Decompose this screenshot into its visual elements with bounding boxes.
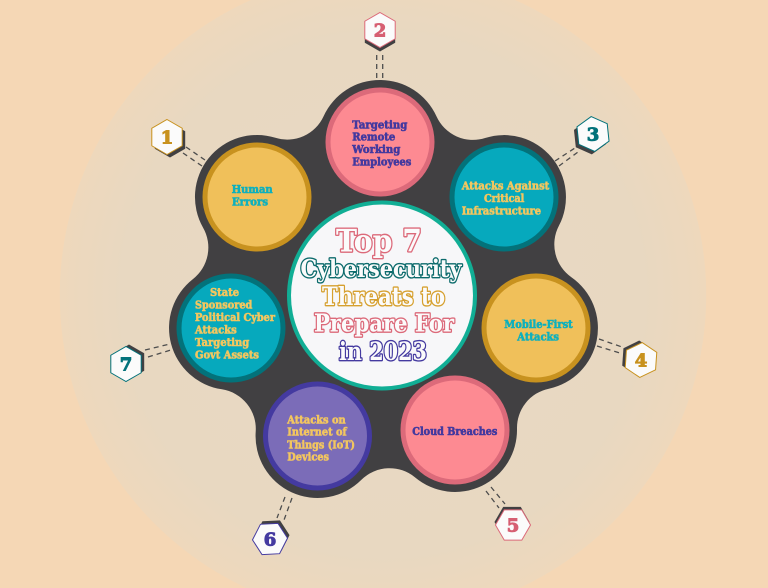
panel 6: attacks on internet of things: Internet of — [287, 426, 348, 439]
panel 6: attacks on internet of things — [263, 382, 372, 490]
panel 3: attacks against critical infrastructure: Attacks Against — [461, 179, 550, 192]
badge 6 with connector — [249, 497, 293, 561]
panel 3: attacks against critical infrastructure: Critical — [484, 192, 524, 205]
panel 1: human errors: Human — [232, 183, 273, 196]
panel 2: targeting remote working employees: Remote — [352, 130, 395, 144]
badge 2 with connector: 2 — [374, 20, 386, 42]
badge 1 with connector: 1 — [161, 128, 173, 148]
badge 4 with connector: 4 — [635, 350, 647, 372]
panel 7: state sponsored political cyber attacks: Govt Assets — [195, 348, 259, 361]
center title panel: Cybersecurity — [300, 254, 462, 283]
panel 6: attacks on internet of things: Things (IoT) — [287, 438, 355, 451]
badge 4 with connector — [597, 339, 657, 379]
center title panel: Prepare For — [314, 309, 454, 338]
panel 4: mobile-first attacks: Mobile-First — [504, 318, 574, 331]
panel 4: mobile-first attacks: Attacks — [516, 331, 559, 344]
panel 6: attacks on internet of things: Devices — [287, 451, 329, 464]
center title panel — [287, 200, 477, 390]
center title panel: Top 7 — [336, 224, 422, 260]
badge 2 with connector — [365, 12, 395, 80]
center title panel: Threats to — [322, 282, 445, 311]
badge 5 with connector: 5 — [507, 516, 519, 536]
badge 7 with connector — [111, 344, 171, 382]
panel 5: cloud breaches: Cloud Breaches — [412, 425, 497, 438]
panel 7: state sponsored political cyber attacks: State — [210, 286, 239, 299]
panel 7: state sponsored political cyber attacks — [176, 274, 286, 382]
panel 7: state sponsored political cyber attacks: Targeting — [195, 336, 250, 349]
panel 3: attacks against critical infrastructure — [450, 142, 558, 252]
badge 5 with connector — [486, 487, 535, 548]
panel 2: targeting remote working employees: Targeting — [352, 118, 408, 131]
panel 5: cloud breaches — [400, 376, 510, 484]
badge 7 with connector: 7 — [120, 354, 132, 376]
panel 1: human errors: Errors — [232, 196, 268, 209]
panel 2: targeting remote working employees: Working — [351, 143, 401, 156]
center title panel: in 2023 — [339, 337, 427, 366]
badge 6 with connector: 6 — [264, 530, 276, 550]
badge 3 with connector: 3 — [587, 124, 599, 146]
panel 7: state sponsored political cyber attacks: Sponsored — [195, 299, 253, 312]
panel 7: state sponsored political cyber attacks: Attacks — [194, 323, 237, 336]
panel 1: human errors — [202, 142, 312, 252]
panel 7: state sponsored political cyber attacks: Political Cyber — [195, 311, 275, 324]
panel 2: targeting remote working employees — [326, 88, 434, 196]
badge 3 with connector — [555, 115, 610, 166]
panel 3: attacks against critical infrastructure: Infrastructure — [462, 205, 541, 218]
panel 4: mobile-first attacks — [482, 274, 590, 382]
badge 1 with connector — [152, 120, 205, 166]
panel 2: targeting remote working employees: Employees — [352, 156, 411, 168]
dark blob backdrop — [169, 80, 598, 498]
panel 6: attacks on internet of things: Attacks on — [286, 413, 346, 426]
